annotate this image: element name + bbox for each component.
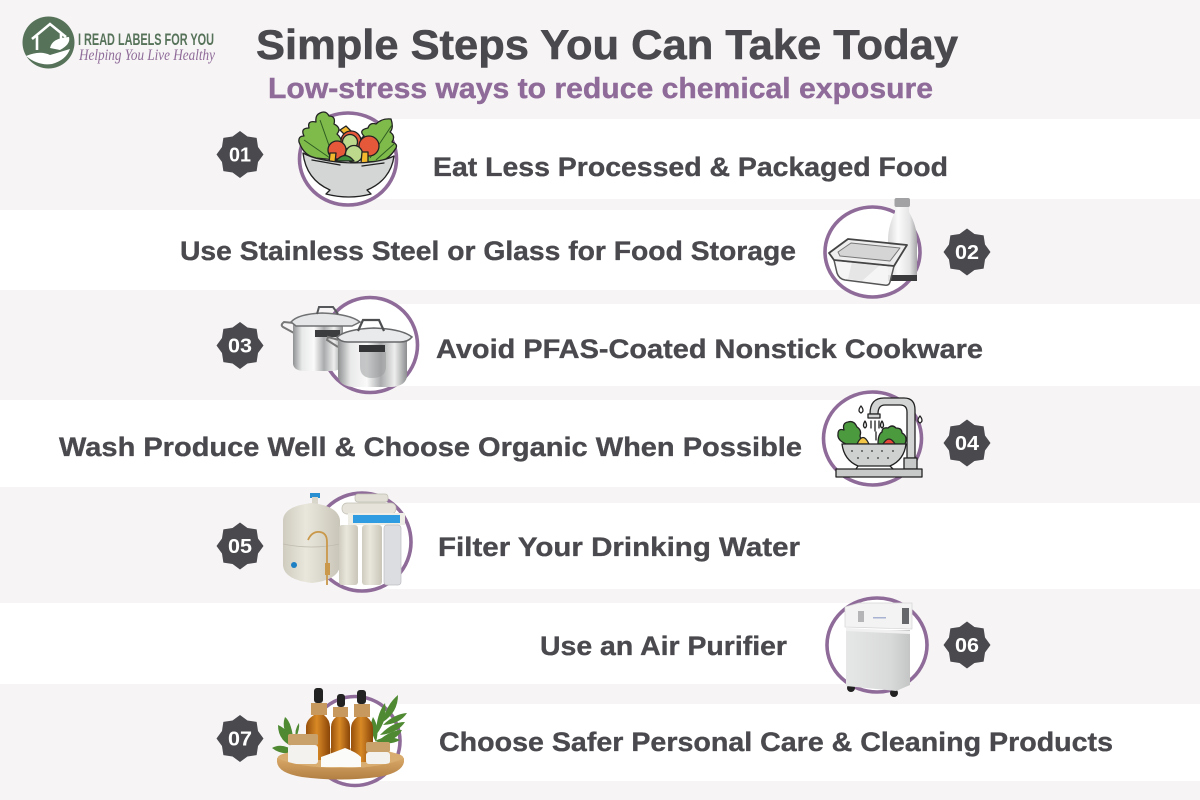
badge 07 [216, 715, 264, 762]
badge 01 [216, 131, 264, 178]
step 5 text: Filter Your Drinking Water [438, 532, 801, 562]
badge 02 [944, 228, 990, 276]
badge 03: 03 [228, 336, 252, 358]
step 7 text: Choose Safer Personal Care & Cleaning Products [439, 727, 1113, 757]
step 2 text: Use Stainless Steel or Glass for Food Storage [180, 236, 796, 266]
logo: Helping You Live Healthy [78, 47, 215, 64]
step 3 text: Avoid PFAS-Coated Nonstick Cookware [436, 334, 983, 364]
logo [22, 16, 215, 68]
icon: stainless steel pots [282, 298, 418, 392]
badge 01: 01 [229, 144, 251, 166]
badge 06: 06 [955, 635, 979, 657]
badge 03 [216, 322, 264, 369]
panel: step 3 [216, 298, 1200, 392]
title: Simple Steps You Can Take Today [256, 21, 959, 68]
badge 05 [216, 522, 264, 570]
badge 04 [944, 420, 990, 466]
step 1 text: Eat Less Processed & Packaged Food [433, 152, 948, 182]
icon: glass container and bottle [825, 198, 920, 297]
icon: water filter system [283, 493, 411, 591]
icon: air purifier [827, 598, 927, 697]
subtitle: Low-stress ways to reduce chemical exposure [268, 73, 933, 105]
badge 07: 07 [228, 728, 252, 750]
icon: produce in colander under faucet [824, 392, 922, 485]
logo: I READ LABELS FOR YOU [78, 30, 214, 49]
badge 04: 04 [955, 433, 980, 455]
panel: step 2 [0, 198, 990, 297]
icon: amber bottles, jars and tray [272, 688, 407, 786]
step 6 text: Use an Air Purifier [540, 631, 788, 661]
panel: step 7 [216, 688, 1200, 786]
icon: salad bowl [299, 112, 396, 205]
badge 05: 05 [228, 536, 252, 558]
panel: step 4 [0, 392, 990, 487]
panel: step 6 [0, 598, 990, 697]
panel: step 5 [216, 493, 1200, 591]
step 4 text: Wash Produce Well & Choose Organic When Possible [59, 432, 802, 462]
badge 02: 02 [955, 242, 979, 264]
panel: step 1 [216, 112, 1200, 205]
badge 06 [944, 622, 990, 668]
